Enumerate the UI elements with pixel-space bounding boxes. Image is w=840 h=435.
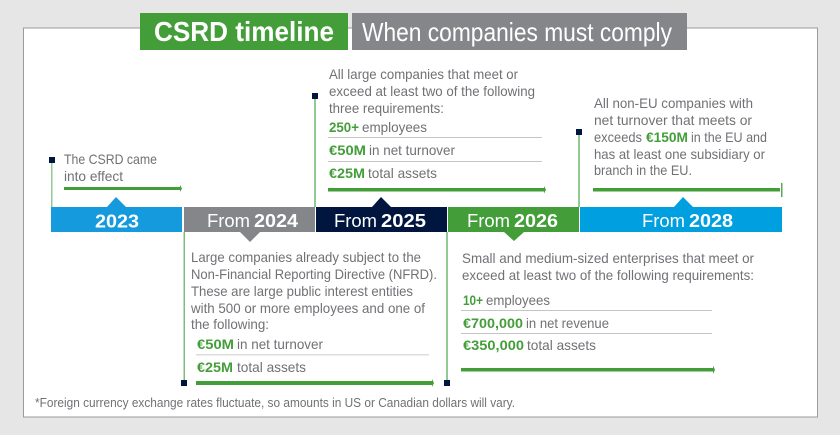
text: 2024: in net turnover xyxy=(237,337,323,352)
timeline segment: 2023 xyxy=(51,197,182,232)
text: 2028: branch in the EU. xyxy=(594,163,692,178)
timeline segment: from 2025: 2025 xyxy=(381,210,426,231)
text: 2026: total assets xyxy=(527,338,596,353)
text: 2024: with 500 or more employees and one of xyxy=(190,301,425,316)
text: 2025: total assets xyxy=(368,166,437,181)
timeline segment: from 2028 xyxy=(580,197,782,232)
marker: 2025 xyxy=(312,93,318,207)
text: 2024: €25M xyxy=(197,360,233,375)
arrow: 2026 xyxy=(461,366,715,374)
text: 2026 xyxy=(461,251,754,353)
title: CSRD timeline xyxy=(154,16,334,47)
text: 2026: 10+ xyxy=(463,293,483,308)
timeline segment: from 2024 xyxy=(184,207,315,242)
text: 2025: €25M xyxy=(329,166,365,181)
text: 2028 xyxy=(594,96,767,178)
text: 2024: These are large public interest entities xyxy=(191,284,413,299)
text: 2026: €350,000 xyxy=(463,338,524,353)
timeline segment: from 2026 xyxy=(448,207,579,241)
text: 2024: €50M xyxy=(197,337,234,352)
text: 2026: in net revenue xyxy=(526,316,609,331)
marker: 2024 xyxy=(181,232,187,386)
text: 2025: employees xyxy=(362,120,427,135)
text: 2023: into effect xyxy=(64,169,123,184)
text: 2026: employees xyxy=(486,293,550,308)
text: 2023: The CSRD came xyxy=(64,152,157,167)
timeline segment: from 2024: 2024 xyxy=(254,210,299,231)
text: 2028: All non-EU companies with xyxy=(594,96,753,111)
text: 2025: €50M xyxy=(329,143,366,158)
text: 2028: has at least one subsidiary or xyxy=(594,147,765,162)
text: 2025 xyxy=(328,67,542,181)
text: 2028: net turnover that meets or xyxy=(594,113,752,128)
text: 2026: €700,000 xyxy=(463,316,523,331)
timeline segment: from 2024: From xyxy=(207,210,250,231)
timeline segment: from 2025 xyxy=(316,197,447,232)
arrow: 2025 xyxy=(328,186,546,194)
text: 2026: Small and medium-sized enterprises that meet or xyxy=(462,251,754,266)
text: 2024: Large companies already subject to the xyxy=(191,250,421,265)
text: 2024: total assets xyxy=(237,360,306,375)
text: 2028: exceeds xyxy=(594,130,642,145)
text: 2025: three requirements: xyxy=(329,101,444,116)
timeline segment: from 2026: From xyxy=(467,210,510,231)
text: 2024: the following: xyxy=(191,317,269,332)
marker: 2026 xyxy=(444,232,450,386)
text: 2023 xyxy=(64,152,157,184)
text: 2028: €150M xyxy=(646,130,688,145)
arrow: 2028 xyxy=(593,183,782,197)
text: 2025: 250+ xyxy=(329,120,359,135)
text: 2025: exceed at least two of the following xyxy=(329,84,535,99)
footnote: *Foreign currency exchange rates fluctuate, so amounts in US or Canadian dollars will vary. xyxy=(35,396,515,410)
text: 2028: in the EU and xyxy=(691,130,767,145)
timeline segment: from 2025: From xyxy=(334,210,377,231)
text: 2024: Non-Financial Reporting Directive (NFRD). xyxy=(191,267,437,282)
text: 2026: exceed at least two of the following requirements: xyxy=(462,268,754,283)
timeline segment: from 2028: From xyxy=(642,210,685,231)
arrow: 2023 xyxy=(64,185,182,192)
text: 2025: All large companies that meet or xyxy=(329,67,518,82)
marker: 2028 xyxy=(576,129,582,207)
arrow: 2024 xyxy=(196,379,434,387)
text: 2025: in net turnover xyxy=(369,143,455,158)
text: 2024 xyxy=(190,250,437,375)
timeline segment: from 2028: 2028 xyxy=(689,210,733,231)
timeline segment: from 2026: 2026 xyxy=(514,210,558,231)
timeline segment: 2023: 2023 xyxy=(95,210,139,232)
subtitle: When companies must comply xyxy=(362,17,672,47)
marker: 2023 xyxy=(49,157,55,207)
